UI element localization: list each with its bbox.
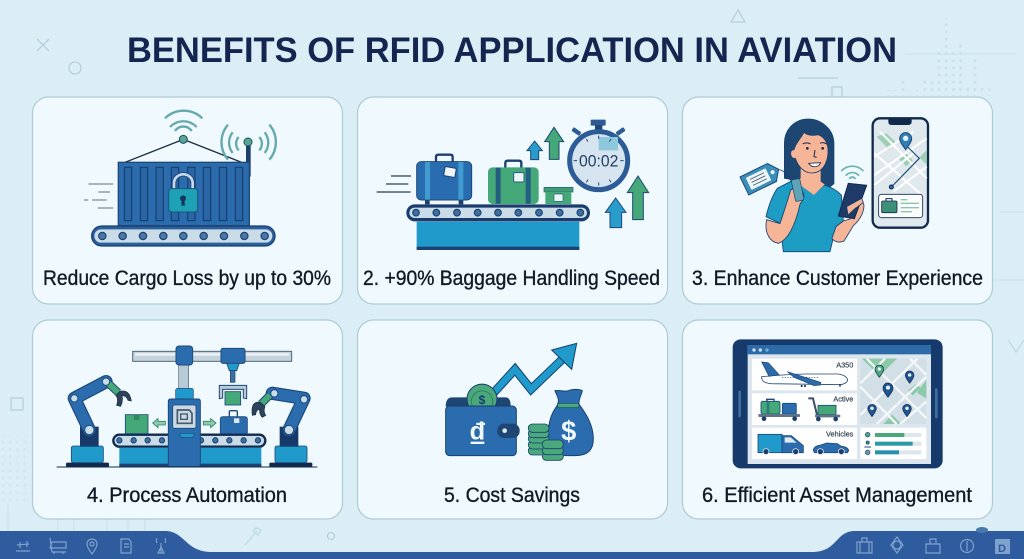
stopwatch readout: 00:02 [579, 153, 618, 171]
status bars [864, 432, 921, 455]
baggage cart [758, 398, 840, 421]
illustration: wallet, rising arrow and money bag: $ [479, 393, 486, 407]
left robot arm [66, 378, 131, 467]
illustration: tablet asset dashboard: Active [833, 394, 853, 403]
map with pins [860, 359, 926, 424]
panel: process automation [32, 320, 342, 519]
illustration: tablet asset dashboard: A350 [836, 361, 853, 370]
left arm and hand [766, 188, 804, 243]
panel: reduce cargo loss [32, 97, 342, 304]
illustration: robotic automation line [57, 346, 317, 467]
footer band [0, 531, 1024, 559]
illustration: baggage on conveyor with stopwatch [377, 120, 649, 250]
label: customer experience: 3. Enhance Customer Experience [692, 267, 983, 290]
illustration: tablet asset dashboard: Vehicles [826, 430, 854, 439]
footer icons left [16, 538, 166, 554]
title: BENEFITS OF RFID APPLICATION IN AVIATION [127, 31, 897, 70]
label: cost savings: 5. Cost Savings [444, 484, 580, 507]
illustration: traveller with tag and phone map [740, 118, 928, 252]
panel: asset management [682, 320, 992, 519]
neck [793, 167, 825, 195]
panel: baggage handling speed [358, 97, 668, 304]
label: baggage speed: 2. +90% Baggage Handling Speed [363, 267, 660, 290]
panel: cost savings [358, 320, 668, 519]
illustration: wallet, rising arrow and money bag: đ [470, 417, 486, 445]
label: process automation: 4. Process Automation [87, 484, 287, 507]
right arm and hand [832, 197, 864, 242]
illustration: wallet, rising arrow and money bag: $ [561, 416, 576, 447]
label: reduce cargo loss: Reduce Cargo Loss by up to 30% [43, 267, 331, 290]
panel: customer experience [682, 97, 992, 304]
aircraft [762, 362, 848, 387]
hair [784, 119, 834, 190]
shirt [766, 180, 843, 252]
label: asset management: 6. Efficient Asset Management [702, 484, 972, 507]
footer icons right [857, 537, 1010, 555]
face [791, 132, 828, 173]
footer icons right: D [998, 543, 1006, 555]
illustration: cargo container on conveyor [84, 111, 276, 246]
right robot arm [252, 390, 312, 467]
illustration: tablet asset dashboard [733, 339, 943, 468]
vehicles [758, 434, 849, 455]
illustration: wallet, rising arrow and money bag [446, 343, 593, 460]
